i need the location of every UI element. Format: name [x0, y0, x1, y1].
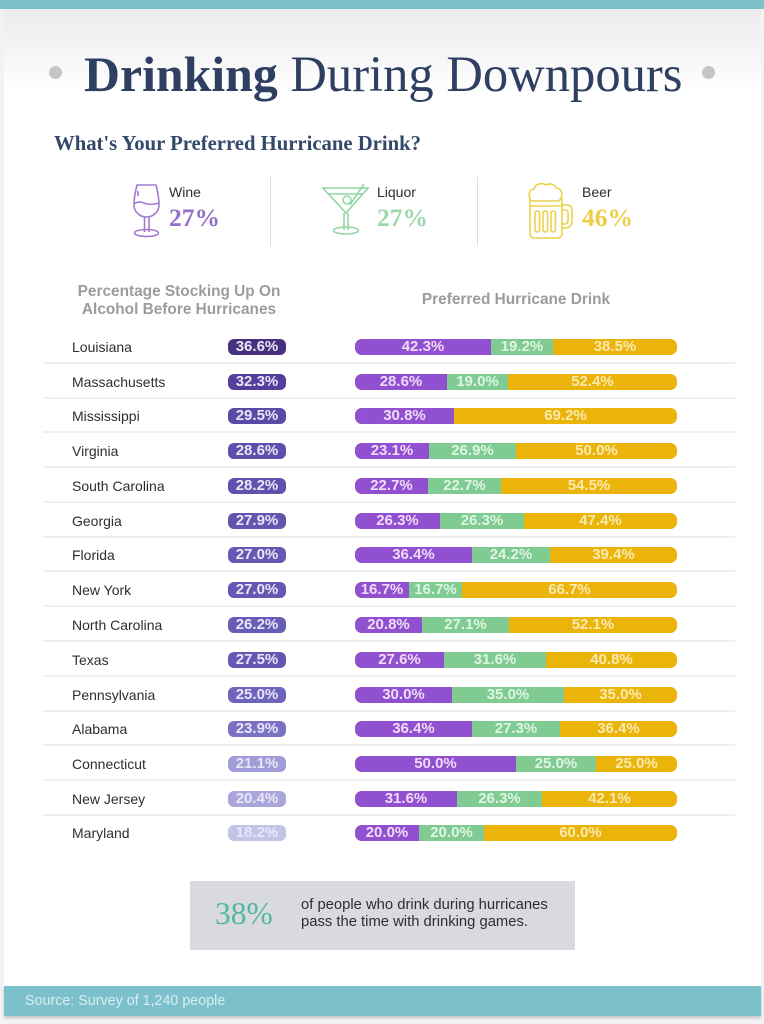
- title: [49, 46, 715, 102]
- row: Pennsylvania: [43, 686, 735, 712]
- liquor percentage: 27%: [377, 203, 428, 232]
- divider: [477, 177, 478, 246]
- row: Massachusetts: 32.3%: [236, 372, 278, 390]
- row: New York: [43, 581, 735, 607]
- row: Mississippi: Mississippi: [72, 408, 140, 424]
- row: Florida: Florida: [72, 547, 115, 563]
- top teal band: [0, 0, 764, 9]
- row: Maryland: 18.2%: [236, 824, 278, 841]
- row: Texas: Texas: [72, 652, 109, 668]
- row: New Jersey: New Jersey: [72, 790, 145, 806]
- row: Connecticut: [43, 755, 735, 781]
- summary: liquor: [321, 184, 428, 235]
- row: Maryland: Maryland: [72, 825, 130, 841]
- row: Georgia: [43, 512, 735, 538]
- row: Alabama: Alabama: [72, 721, 127, 737]
- row: Texas: [43, 650, 735, 677]
- row: Texas: 27.5%: [236, 650, 278, 668]
- row: South Carolina: South Carolina: [72, 478, 165, 494]
- callout percentage: 38%: [215, 896, 273, 931]
- summary: wine: [133, 184, 220, 238]
- callout: drinking games: [190, 881, 575, 950]
- icon: wine glass: [133, 184, 160, 238]
- title right dot: [702, 66, 715, 79]
- title text: Drinking During Downpours: [84, 46, 682, 102]
- beer label: Beer: [582, 184, 612, 200]
- footer band with source: [4, 986, 761, 1016]
- beer percentage: 46%: [582, 203, 633, 232]
- subtitle: What's Your Preferred Hurricane Drink?: [54, 133, 421, 155]
- source text: Source: Survey of 1,240 people: [25, 993, 225, 1009]
- column heading: stocking up: Alcohol Before Hurricanes: [82, 301, 276, 318]
- row: Maryland: [72, 824, 677, 841]
- row: New York: New York: [72, 582, 131, 598]
- row: Louisiana: 36.6%: [236, 338, 278, 354]
- row: Connecticut: 21.1%: [236, 755, 278, 772]
- summary: beer: [528, 182, 633, 239]
- row: Georgia: 27.9%: [236, 512, 278, 528]
- row: Florida: 27.0%: [236, 546, 278, 563]
- row: Alabama: [43, 720, 735, 746]
- row: North Carolina: 26.2%: [236, 616, 278, 633]
- icon: martini glass: [321, 184, 370, 235]
- row: South Carolina: 28.2%: [236, 476, 278, 494]
- row: South Carolina: [43, 476, 735, 503]
- row: Massachusetts: Massachusetts: [72, 374, 165, 390]
- column heading: stocking up: [78, 283, 280, 318]
- icon: beer mug: [528, 182, 573, 239]
- wine label: Wine: [169, 184, 201, 200]
- row: New Jersey: 20.4%: [236, 790, 278, 806]
- row: Louisiana: [43, 338, 735, 364]
- callout text: pass the time with drinking games.: [301, 914, 528, 930]
- row: Virginia: Virginia: [72, 443, 118, 459]
- title left dot: [49, 66, 62, 79]
- row: Georgia: Georgia: [72, 512, 122, 528]
- liquor label: Liquor: [377, 184, 416, 200]
- row: Mississippi: 29.5%: [236, 407, 278, 424]
- column heading: preferred drink: Preferred Hurricane Drink: [422, 291, 610, 308]
- row: Massachusetts: [43, 372, 735, 399]
- divider: [270, 177, 271, 246]
- callout text: [301, 897, 548, 930]
- row: Virginia: [43, 442, 735, 468]
- row: Alabama: 23.9%: [236, 720, 278, 737]
- row: North Carolina: North Carolina: [72, 617, 162, 633]
- wine percentage: 27%: [169, 203, 220, 232]
- callout text: of people who drink during hurricanes: [301, 897, 548, 913]
- row: Connecticut: Connecticut: [72, 756, 146, 772]
- row: Pennsylvania: Pennsylvania: [72, 686, 155, 702]
- row: North Carolina: [43, 616, 735, 642]
- row: Mississippi: [43, 407, 735, 433]
- row: New York: 27.0%: [236, 581, 278, 598]
- row: Louisiana: Louisiana: [72, 338, 132, 354]
- row: Pennsylvania: 25.0%: [236, 686, 278, 702]
- row: Florida: [43, 546, 735, 572]
- row: Virginia: 28.6%: [236, 442, 278, 459]
- column heading: stocking up: Percentage Stocking Up On: [78, 283, 280, 300]
- row: New Jersey: [43, 790, 735, 816]
